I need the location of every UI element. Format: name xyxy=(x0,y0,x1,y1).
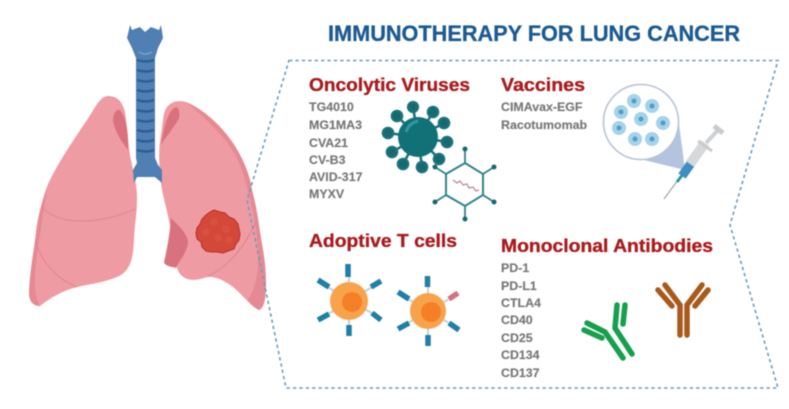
panel: oncolytic viruses xyxy=(309,75,496,222)
icon: left lung xyxy=(29,96,137,306)
heading: monoclonal antibodies: Monoclonal Antibodies xyxy=(501,236,713,256)
list: monoclonal antibodies: CD40 xyxy=(501,313,533,327)
icon: tumour xyxy=(196,210,240,253)
icon: right lung xyxy=(159,101,266,310)
icon: trachea xyxy=(127,25,163,183)
list: monoclonal antibodies: CD25 xyxy=(501,331,533,345)
list: oncolytic viruses: TG4010 xyxy=(309,100,354,114)
list: vaccines: Racotumomab xyxy=(501,118,587,132)
panel: monoclonal antibodies xyxy=(501,236,713,380)
list: oncolytic viruses: CV-B3 xyxy=(309,153,346,167)
list: oncolytic viruses: CVA21 xyxy=(309,136,348,150)
list: monoclonal antibodies: CD137 xyxy=(501,366,540,380)
icon: syringe xyxy=(664,126,723,199)
dashed panel outline xyxy=(247,60,778,388)
icon: viral capsid xyxy=(432,146,496,222)
icon: lungs with tumour xyxy=(29,25,266,310)
list: monoclonal antibodies: PD-1 xyxy=(501,261,529,275)
list: oncolytic viruses: MG1MA3 xyxy=(309,118,362,132)
panel: vaccines xyxy=(501,75,723,199)
icon: magnified cells xyxy=(604,84,685,170)
list: monoclonal antibodies: CD134 xyxy=(501,348,540,362)
icon: T cell 2 xyxy=(398,276,459,346)
list: vaccines: CIMAvax-EGF xyxy=(501,100,583,114)
icon: T cell 1 xyxy=(318,264,381,336)
list: monoclonal antibodies: PD-L1 xyxy=(501,279,537,293)
icon: green antibody xyxy=(584,305,632,358)
heading: oncolytic viruses: Oncolytic Viruses xyxy=(309,75,470,95)
icon: brown antibody xyxy=(658,285,708,335)
panel: adoptive T cells xyxy=(309,231,459,346)
icon: virus xyxy=(383,102,452,172)
list: monoclonal antibodies: CTLA4 xyxy=(501,296,541,310)
heading: adoptive T cells: Adoptive T cells xyxy=(309,231,457,251)
list: oncolytic viruses: AVID-317 xyxy=(309,170,363,184)
heading: vaccines: Vaccines xyxy=(501,75,585,95)
list: oncolytic viruses: MYXV xyxy=(309,187,345,201)
title: IMMUNOTHERAPY FOR LUNG CANCER xyxy=(328,21,740,46)
